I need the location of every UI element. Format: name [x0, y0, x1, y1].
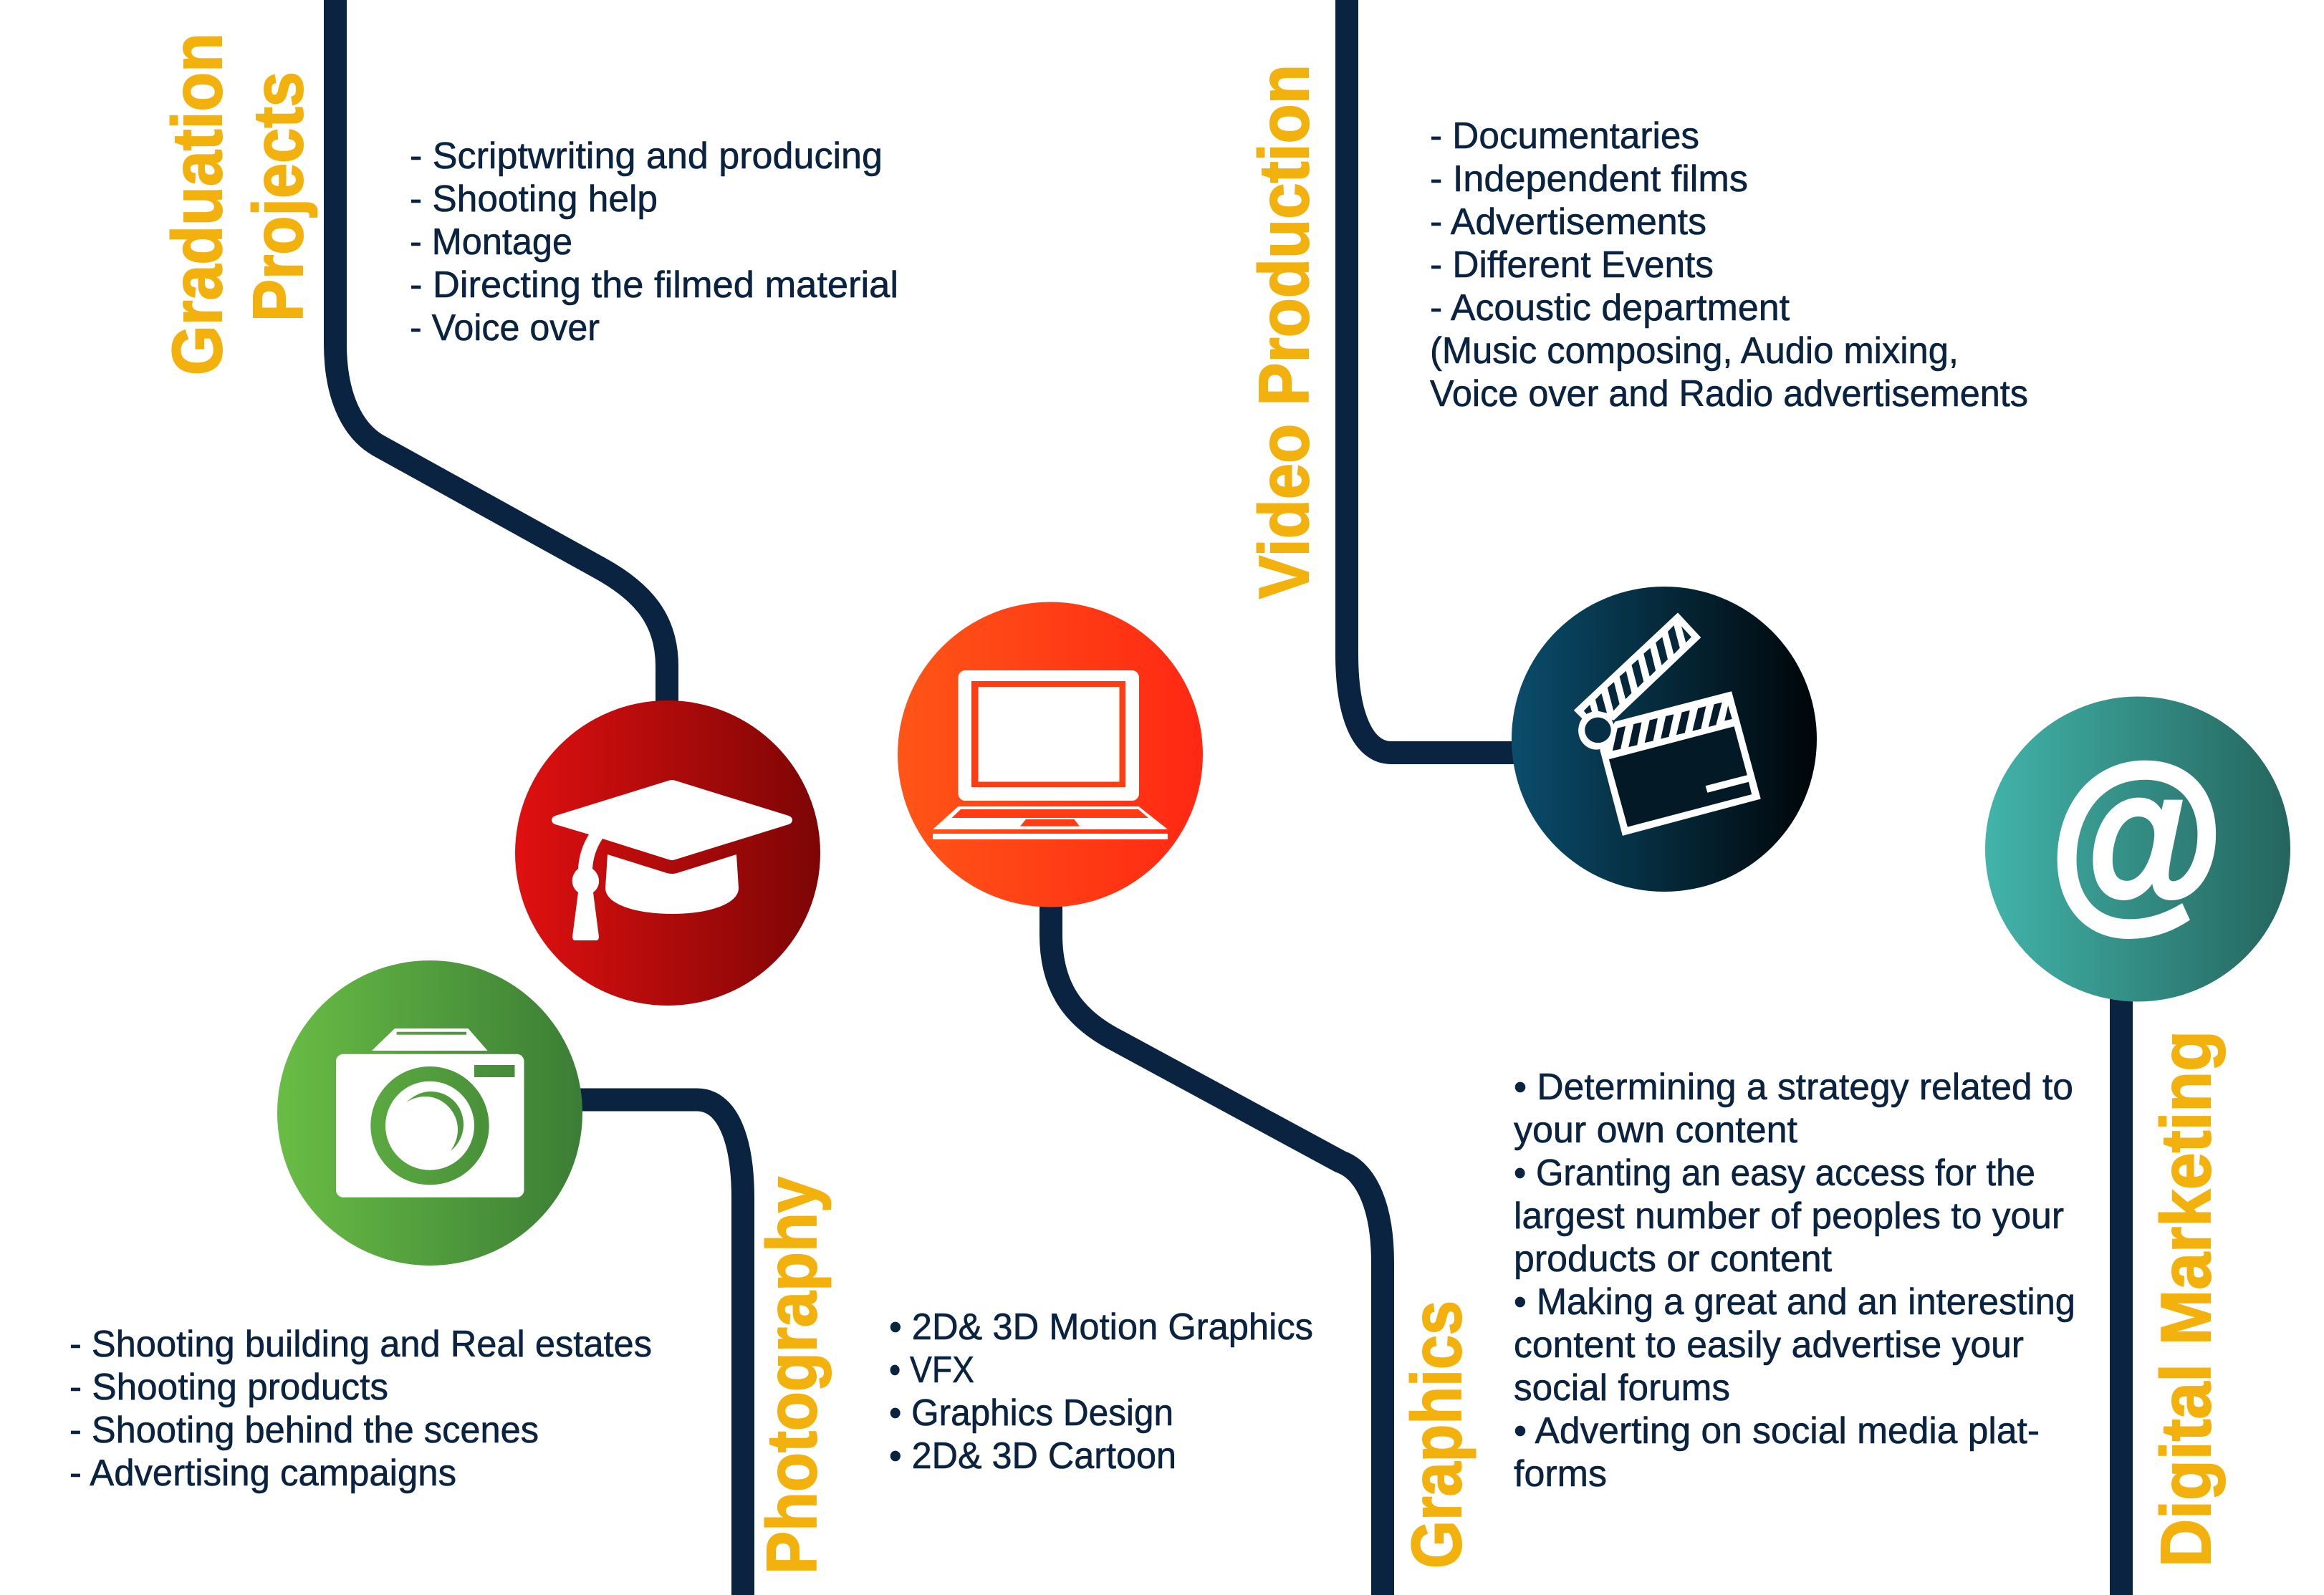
connector line: video production: [1347, 0, 1519, 753]
heading: Graphics: Graphics: [1397, 1301, 1476, 1569]
text block: digital marketing list: forms: [1514, 1453, 1607, 1495]
text block: graphics list: [889, 1306, 1313, 1477]
text block: graduation list: - Montage: [410, 221, 572, 263]
text block: video production list: - Different Events: [1430, 244, 1714, 286]
text block: photography list: - Shooting building and Real estates: [69, 1324, 652, 1365]
panel: photography: [69, 960, 831, 1595]
panel: digital marketing: [1514, 696, 2290, 1595]
text block: digital marketing list: largest number of peoples to your: [1514, 1195, 2064, 1237]
icon: film clapperboard: [1512, 587, 1817, 892]
heading: Digital Marketing: Digital Marketing: [2146, 1031, 2225, 1567]
panel: graduation projects: [158, 0, 898, 1006]
text block: photography list: - Shooting products: [69, 1367, 388, 1408]
connector line: graphics: [1051, 902, 1383, 1595]
text block: graphics list: • 2D& 3D Cartoon: [889, 1435, 1176, 1477]
text block: video production list: - Advertisements: [1430, 201, 1706, 243]
text block: graphics list: • VFX: [889, 1349, 974, 1391]
heading: Graduation: Graduation: [158, 33, 236, 375]
text block: digital marketing list: social forums: [1514, 1367, 1730, 1409]
text block: digital marketing list: • Making a great and an interesting: [1514, 1281, 2075, 1323]
text block: digital marketing list: • Adverting on social media plat-: [1514, 1410, 2040, 1452]
text block: graduation list: - Scriptwriting and producing: [410, 135, 883, 177]
text block: video production list: Voice over and Radio advertisements: [1430, 373, 2028, 415]
text block: graduation list: - Shooting help: [410, 178, 658, 220]
icon: laptop: [898, 602, 1203, 907]
icon: camera: [277, 960, 582, 1266]
panel: video production: [1244, 0, 2028, 892]
text block: digital marketing list: • Determining a strategy related to: [1514, 1066, 2073, 1108]
icon: at sign: @: [2050, 724, 2224, 947]
text block: digital marketing list: [1514, 1066, 2075, 1495]
text block: digital marketing list: content to easily advertise your: [1514, 1324, 2024, 1366]
text block: graduation list: - Directing the filmed material: [410, 264, 898, 306]
text block: digital marketing list: your own content: [1514, 1109, 1798, 1151]
connector line: digital marketing: [2110, 996, 2133, 1595]
text block: video production list: - Independent films: [1430, 158, 1748, 200]
icon: at sign: [1985, 696, 2290, 1001]
text block: video production list: - Acoustic department: [1430, 287, 1790, 329]
connector line: graduation projects: [335, 0, 667, 709]
heading: Photography: Photography: [752, 1177, 831, 1574]
text block: digital marketing list: • Granting an easy access for the: [1514, 1152, 2035, 1194]
text block: digital marketing list: products or content: [1514, 1238, 1833, 1280]
text block: video production list: (Music composing, Audio mixing,: [1430, 330, 1959, 372]
text block: photography list: - Shooting behind the scenes: [69, 1410, 539, 1451]
text block: video production list: [1430, 115, 2028, 415]
heading: Video Production: Video Production: [1244, 64, 1323, 599]
text block: photography list: - Advertising campaigns: [69, 1452, 456, 1494]
text block: graduation list: - Voice over: [410, 307, 600, 349]
icon: graduation cap: [515, 700, 820, 1006]
text block: graphics list: • 2D& 3D Motion Graphics: [889, 1306, 1313, 1348]
heading: Projects: Projects: [239, 72, 317, 322]
panel: graphics: [889, 602, 1476, 1595]
text block: video production list: - Documentaries: [1430, 115, 1699, 157]
text block: graduation list: [410, 135, 898, 349]
text block: graphics list: • Graphics Design: [889, 1392, 1173, 1434]
connector line: photography: [577, 1100, 743, 1595]
text block: photography list: [69, 1324, 652, 1494]
